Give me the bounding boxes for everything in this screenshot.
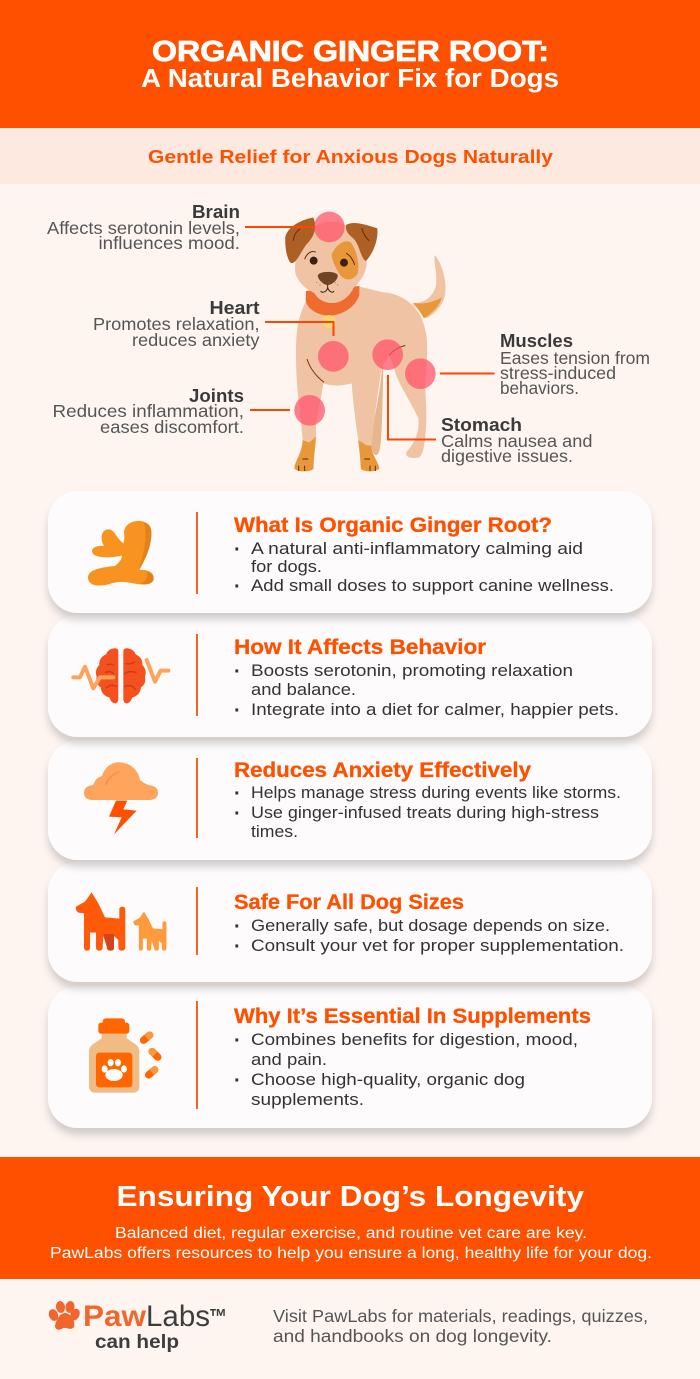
ears (285, 218, 377, 263)
header banner (0, 0, 700, 128)
card text: Reduces Anxiety Effectively (234, 759, 531, 782)
eye patch (332, 241, 358, 279)
longevity banner (0, 1157, 700, 1279)
label: heart: reduces anxiety (132, 330, 260, 350)
far hind leg (371, 365, 383, 455)
card text: Generally safe, but dosage depends on size. (251, 916, 610, 935)
label: stomach: Stomach (441, 414, 522, 435)
label: muscles: behaviors. (500, 378, 579, 398)
body (296, 287, 427, 458)
card text: Integrate into a diet for calmer, happier pets. (251, 700, 619, 719)
card text: Helps manage stress during events like storms. (251, 783, 621, 802)
label: muscles: Muscles (500, 330, 573, 351)
label: brain: influences mood. (98, 233, 240, 253)
card text: · (234, 916, 241, 938)
card text: Use ginger-infused treats during high-stress (251, 803, 599, 822)
banner heading: Ensuring Your Dog’s Longevity (116, 1181, 584, 1213)
label: stomach: digestive issues. (441, 446, 573, 466)
label: heart (93, 297, 260, 350)
card text: Choose high-quality, organic dog (251, 1070, 525, 1089)
card text: Why It’s Essential In Supplements (234, 1005, 591, 1028)
subtitle band (0, 128, 700, 184)
icon: brain with waves (73, 648, 168, 703)
card text: · (234, 576, 241, 598)
head (295, 222, 367, 297)
card text: Consult your vet for proper supplementation. (251, 936, 624, 955)
collar (306, 286, 359, 316)
banner text: Balanced diet, regular exercise, and routine vet care are key. (115, 1225, 587, 1242)
toe lines (299, 459, 375, 471)
card text (234, 891, 624, 958)
title: A Natural Behavior Fix for Dogs (141, 65, 559, 93)
card text: What Is Organic Ginger Root? (234, 514, 552, 537)
card text (234, 1005, 591, 1109)
label: stomach (441, 414, 592, 466)
divider (196, 512, 198, 594)
tail (412, 255, 446, 318)
divider (196, 887, 198, 955)
leg and chest creases (307, 345, 405, 382)
card text: · (234, 700, 241, 722)
card text (234, 636, 619, 722)
card text: for dogs. (251, 557, 322, 576)
paws (294, 437, 379, 471)
card: safe for all dog sizes (48, 862, 652, 982)
card text: Add small doses to support canine wellness. (251, 576, 614, 595)
illustration: dog (285, 212, 446, 471)
label: heart: Heart (210, 297, 260, 318)
icon: storm cloud (84, 762, 158, 834)
card text: · (234, 661, 241, 683)
divider (196, 1001, 198, 1109)
ear creases (293, 228, 369, 241)
footer text: Visit PawLabs for materials, readings, quizzes, (273, 1306, 648, 1326)
card text: · (234, 1070, 241, 1092)
dog anatomy diagram (47, 201, 650, 471)
logo wordmark: Paw (83, 1300, 147, 1333)
label: stomach: Calms nausea and (441, 431, 592, 451)
card: why it's essential in supplements (48, 986, 652, 1128)
label: heart: Promotes relaxation, (93, 314, 260, 334)
banner text: PawLabs offers resources to help you ensure a long, healthy life for your dog. (50, 1245, 652, 1262)
title (141, 36, 559, 93)
logo wordmark: ™ (209, 1304, 227, 1329)
face (305, 252, 355, 292)
highlight spots (294, 212, 436, 426)
footer logo (47, 1300, 227, 1353)
card: what is organic ginger root (48, 491, 652, 613)
label: joints: eases discomfort. (100, 417, 244, 437)
icon: ginger root (88, 521, 154, 586)
card: reduces anxiety effectively (48, 740, 652, 860)
label: muscles (500, 330, 650, 398)
card text: · (234, 1030, 241, 1052)
card text: Safe For All Dog Sizes (234, 891, 464, 914)
leader lines (245, 227, 494, 440)
icon: supplement bottle (89, 1018, 163, 1093)
card text: · (234, 803, 241, 825)
logo wordmark (83, 1300, 227, 1333)
card text: · (234, 783, 241, 805)
icon: paw (47, 1300, 82, 1330)
card text: and balance. (251, 680, 356, 699)
collar tag (322, 315, 336, 328)
card text: How It Affects Behavior (234, 636, 486, 659)
label: muscles: Eases tension from (500, 348, 650, 368)
footer text: and handbooks on dog longevity. (273, 1326, 552, 1346)
label: brain: Affects serotonin levels, (47, 218, 240, 238)
can help: can help (95, 1332, 179, 1353)
subtitle band: Gentle Relief for Anxious Dogs Naturally (148, 146, 554, 167)
card text: · (234, 539, 241, 561)
divider (196, 634, 198, 716)
label: joints: Joints (189, 385, 244, 406)
label: joints: Reduces inflammation, (52, 401, 244, 421)
card text: and pain. (251, 1050, 327, 1069)
card text (234, 759, 621, 841)
icon: large and small dogs (76, 892, 166, 951)
banner text (50, 1225, 652, 1262)
card text: times. (251, 822, 298, 841)
label: brain (47, 201, 240, 253)
card text (234, 514, 614, 598)
label: muscles: stress-induced (500, 363, 616, 383)
logo wordmark: Labs (146, 1300, 210, 1333)
title: ORGANIC GINGER ROOT: (152, 36, 549, 68)
card text: Boosts serotonin, promoting relaxation (251, 661, 573, 680)
footer text (273, 1306, 648, 1346)
card text: A natural anti-inflammatory calming aid (251, 539, 583, 558)
label: joints (52, 385, 244, 437)
divider (196, 758, 198, 838)
card text: Combines benefits for digestion, mood, (251, 1030, 578, 1049)
card text: supplements. (251, 1090, 364, 1109)
card: how it affects behavior (48, 615, 652, 737)
label: brain: Brain (192, 201, 240, 222)
card text: · (234, 936, 241, 958)
